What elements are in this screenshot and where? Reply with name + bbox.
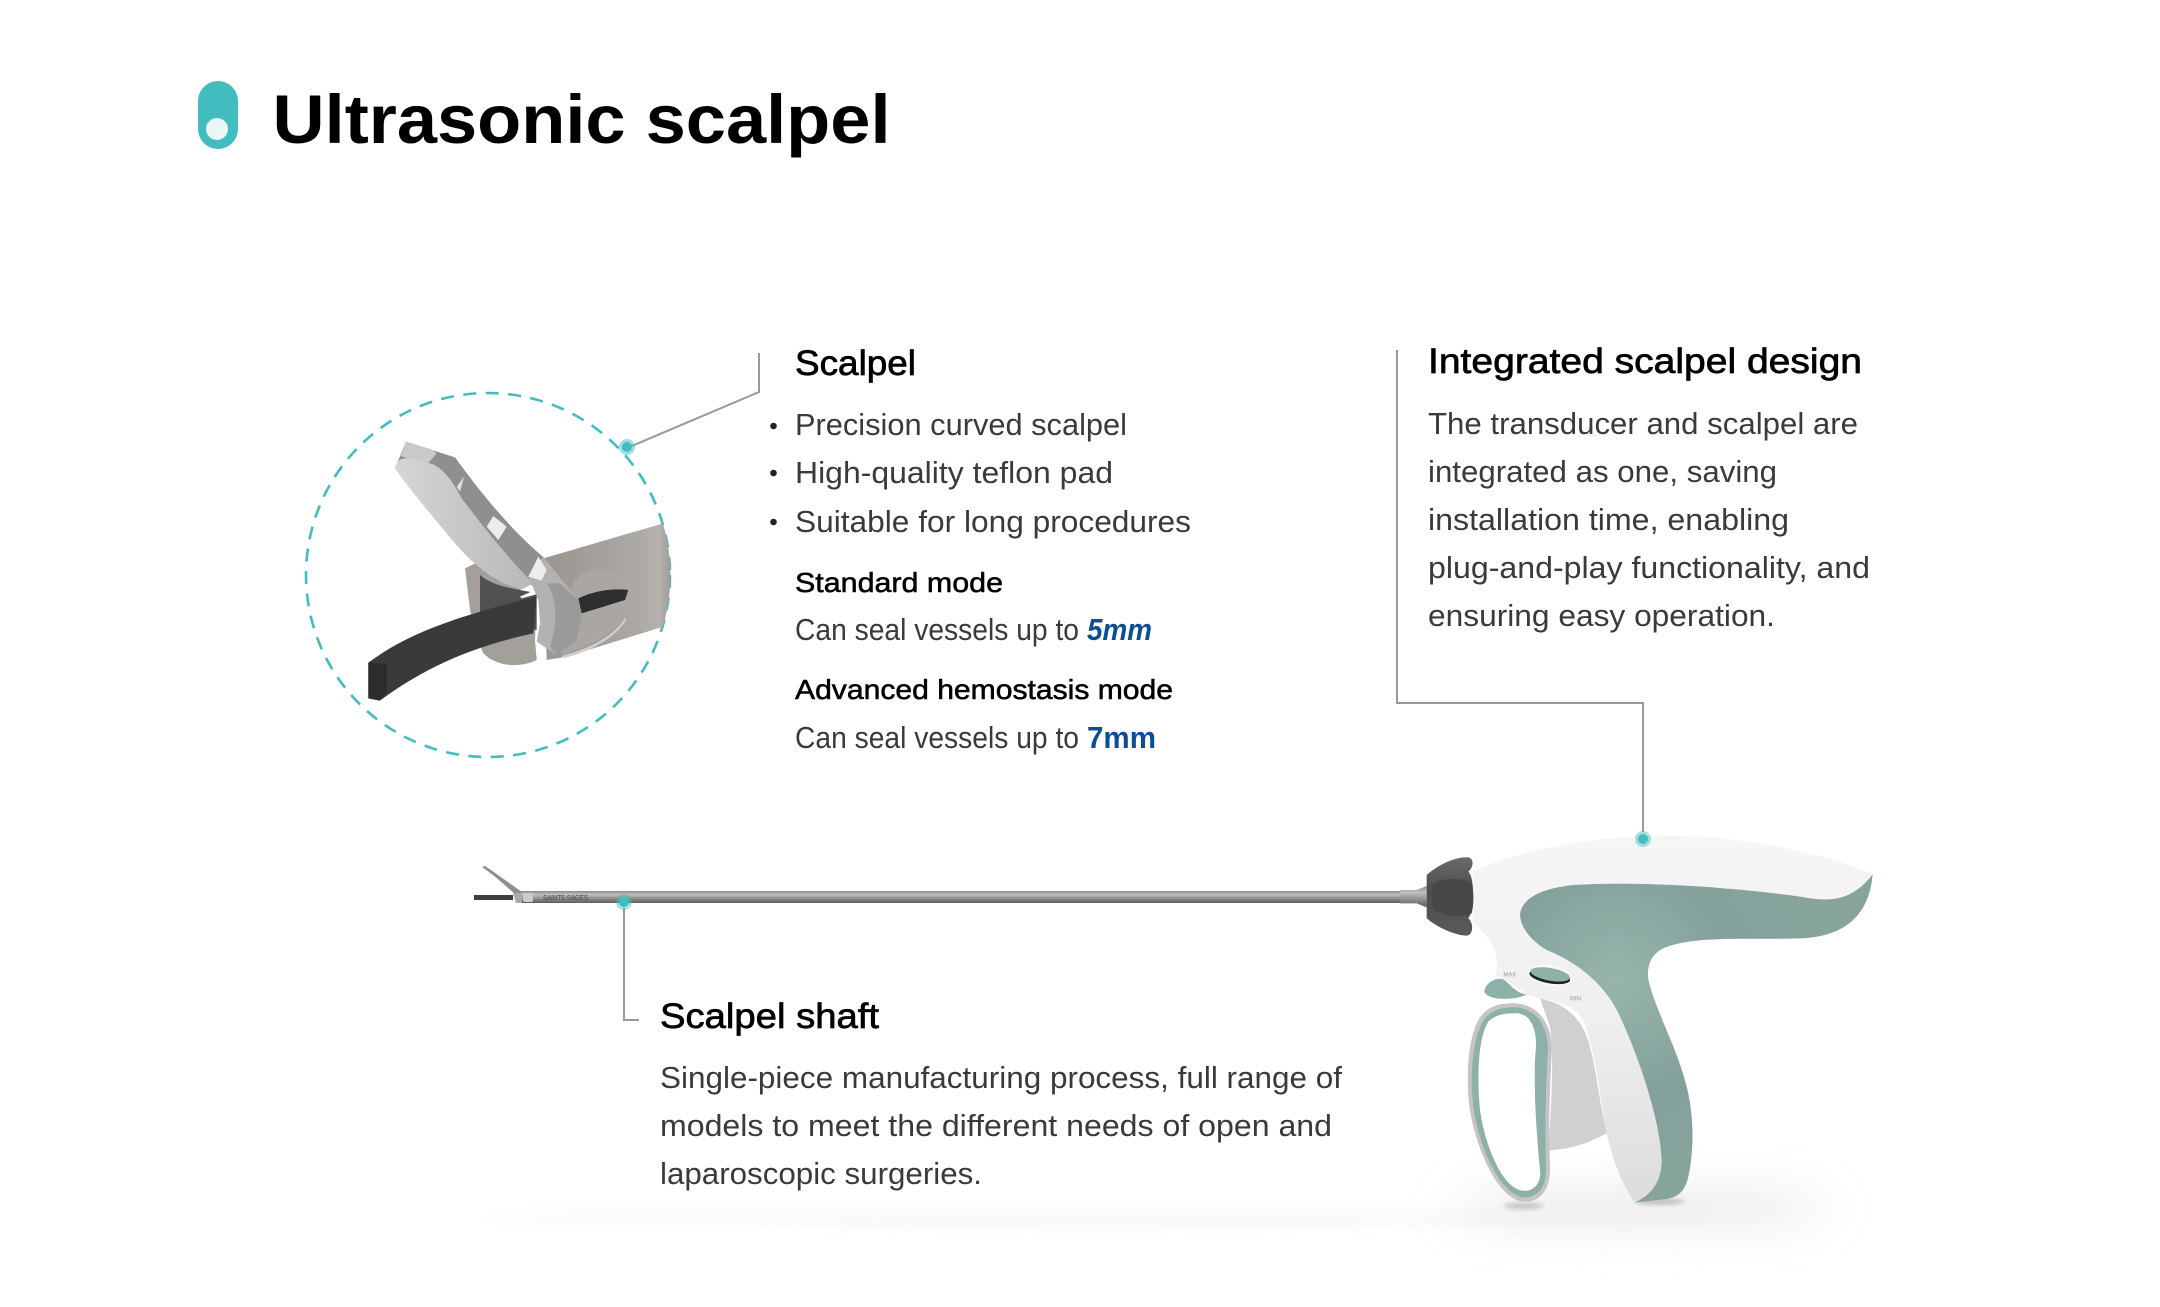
text block: Scalpel shaft [660, 997, 1342, 1191]
body paragraph: installation time, enabling [1428, 502, 1789, 537]
trigger loop [1468, 1003, 1552, 1202]
teal grip [1520, 874, 1873, 1203]
shaft [474, 866, 1405, 903]
title text: Ultrasonic scalpel [272, 81, 890, 158]
shaft: SAINTS SAGES [543, 895, 588, 902]
body paragraph: models to meet the different needs of open and [660, 1108, 1332, 1143]
illustration: magnified jaw [368, 442, 680, 701]
leader line: scalpel detail to text [627, 353, 759, 448]
panel: magnified scalpel jaw [306, 393, 680, 757]
anchor dot: scalpel [619, 439, 635, 455]
handle: MIN [1570, 997, 1581, 1003]
bullet list [770, 407, 1191, 539]
body paragraph: laparoscopic surgeries. [660, 1156, 982, 1191]
body paragraph: ensuring easy operation. [1428, 598, 1775, 633]
body paragraph: plug-and-play functionality, and [1428, 550, 1870, 585]
leader line: integrated design [1397, 350, 1643, 832]
text block: Integrated scalpel design [1428, 342, 1870, 633]
illustration: ultrasonic scalpel device [474, 831, 1873, 1224]
standard mode [795, 567, 1152, 647]
advanced hemostasis mode: Advanced hemostasis mode [795, 674, 1173, 705]
inner grey panel [1540, 998, 1607, 1151]
dashed circle [306, 393, 670, 757]
standard mode: 5mm [1087, 612, 1152, 647]
advanced hemostasis mode [795, 674, 1173, 755]
body paragraph: Single-piece manufacturing process, full range of [660, 1060, 1342, 1095]
body paragraph [660, 1060, 1342, 1191]
bullet list: Suitable for long procedures [795, 504, 1191, 539]
bullet list: High-quality teflon pad [795, 455, 1113, 490]
heading: Scalpel shaft: Scalpel shaft [660, 997, 879, 1036]
floor shadow [480, 1192, 1830, 1224]
trigger knob [1484, 979, 1527, 999]
advanced hemostasis mode: Can seal vessels up to [795, 720, 1079, 755]
activation button [1526, 962, 1574, 989]
anchor dot: handle [1635, 831, 1651, 847]
handle [1400, 836, 1873, 1209]
standard mode: Standard mode [795, 567, 1003, 598]
white body [1473, 836, 1873, 1203]
advanced hemostasis mode: 7mm [1087, 720, 1156, 755]
text block: Scalpel [770, 344, 1191, 755]
nozzle neck [1400, 886, 1427, 907]
bullet list: Precision curved scalpel [795, 407, 1127, 442]
button labels: MAX [1503, 972, 1516, 978]
heading: Scalpel: Scalpel [795, 344, 916, 383]
standard mode: Can seal vessels up to [795, 612, 1079, 647]
heading: Integrated scalpel design: Integrated scalpel design [1428, 342, 1862, 381]
leader line: shaft [624, 908, 639, 1020]
anchor dot: shaft [616, 894, 632, 910]
rotation cap [1427, 857, 1473, 936]
icon: title pill marker [198, 81, 238, 149]
contact shadows [1503, 1203, 1543, 1209]
body paragraph [1428, 406, 1870, 633]
body paragraph: integrated as one, saving [1428, 454, 1777, 489]
body paragraph: The transducer and scalpel are [1428, 406, 1858, 441]
title [198, 81, 890, 158]
